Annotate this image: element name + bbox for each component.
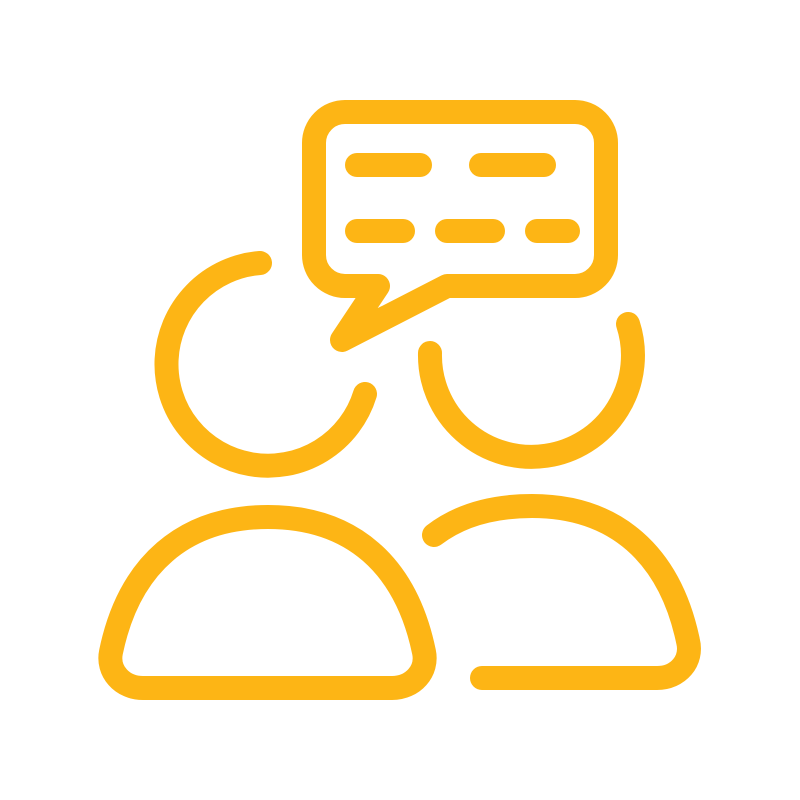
icon: right person head — [430, 324, 633, 457]
icon: right person body — [434, 506, 689, 678]
icon: left person body — [110, 517, 425, 688]
icon: speech bubble outline — [314, 112, 606, 340]
icon: left person head — [166, 263, 365, 466]
icon: speech bubble text lines — [357, 165, 568, 231]
